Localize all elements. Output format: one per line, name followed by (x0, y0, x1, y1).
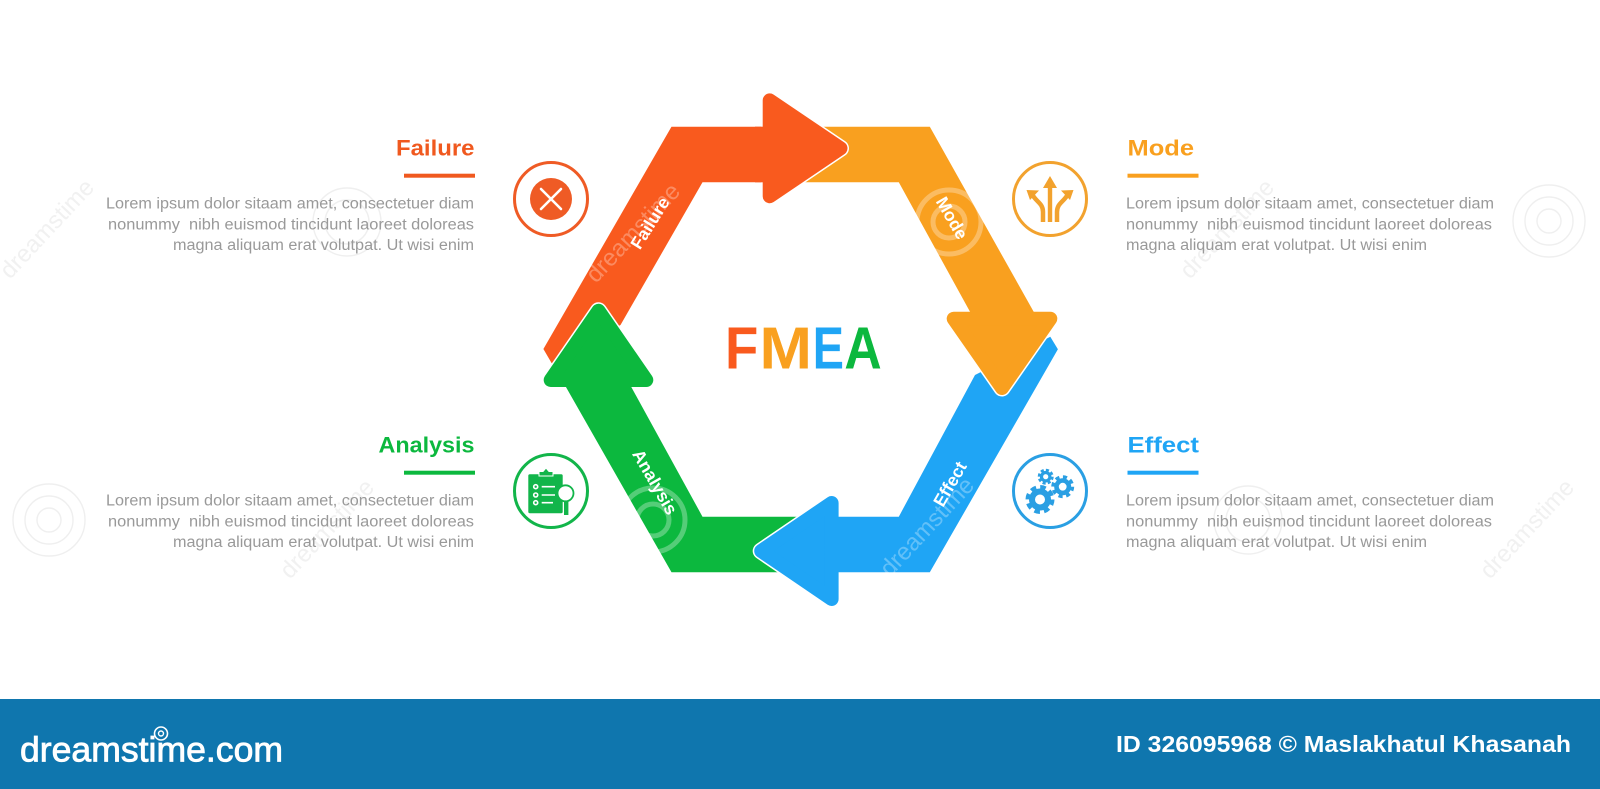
panel: Effect (1126, 433, 1494, 551)
heading: Failure: Failure (396, 136, 474, 161)
text block: Analysis: Lorem ipsum dolor sitaam amet, consectetuer diam (106, 492, 474, 509)
text block: Analysis: magna aliquam erat volutpat. Ut wisi enim (173, 534, 474, 551)
panel: Analysis (106, 433, 475, 551)
text block: Mode: nonummy nibh euismod tincidunt laoreet doloreas (1126, 216, 1492, 233)
text block: Failure: magna aliquam erat volutpat. Ut wisi enim (173, 237, 474, 254)
arrow: Mode (800, 127, 1050, 388)
text block: Effect: nonummy nibh euismod tincidunt laoreet doloreas (1126, 513, 1492, 530)
heading: Effect: Effect (1128, 433, 1200, 458)
heading: Analysis: Analysis (378, 433, 474, 458)
center title: FMEA (725, 315, 882, 381)
watermark: background spirals: dreamstime (1475, 474, 1580, 584)
watermark: background spirals: dreamstime (1175, 174, 1280, 284)
watermark: background spirals: dreamstime (275, 474, 380, 584)
text block: Mode: Lorem ipsum dolor sitaam amet, consectetuer diam (1126, 195, 1494, 212)
watermark: over arrows: dreamstime (581, 178, 686, 288)
text block: Effect (1126, 492, 1494, 551)
icon: mode diverging arrows (1014, 162, 1086, 236)
arrow label: Effect: Effect (929, 458, 971, 510)
panel: Mode (1126, 136, 1494, 254)
icon: analysis clipboard (514, 454, 588, 528)
text block: Effect: Lorem ipsum dolor sitaam amet, consectetuer diam (1126, 492, 1494, 509)
center title: FMEA: M (760, 315, 812, 381)
arrow: Analysis (551, 311, 800, 572)
arrow label: Analysis: Analysis (628, 446, 682, 518)
watermark: background spirals (0, 174, 1585, 584)
text block: Mode (1126, 195, 1494, 254)
footer credit: ID 326095968 © Maslakhatul Khasanah (1116, 731, 1571, 757)
panel: Failure (106, 136, 475, 254)
arrowhead: Failure (755, 100, 840, 196)
text block: Failure: nonummy nibh euismod tincidunt laoreet doloreas (108, 216, 474, 233)
arrow: Effect (761, 337, 1058, 599)
text block: Analysis: nonummy nibh euismod tincidunt laoreet doloreas (108, 513, 474, 530)
heading: Mode: Mode (1128, 136, 1194, 161)
text block: Analysis (106, 492, 474, 551)
center title: FMEA: A (844, 315, 882, 381)
arrow shaft: Failure (543, 127, 770, 363)
arrow label: Failure: Failure (626, 193, 674, 253)
center title: FMEA: F (725, 315, 758, 381)
text block: Effect: magna aliquam erat volutpat. Ut wisi enim (1126, 534, 1427, 551)
text block: Failure: Lorem ipsum dolor sitaam amet, consectetuer diam (106, 195, 474, 212)
watermark: over arrows (581, 178, 981, 582)
center title: FMEA: E (813, 315, 844, 381)
icon: effect gears (1014, 454, 1086, 528)
footer bar (0, 699, 1600, 789)
watermark: over arrows: dreamstime (875, 472, 980, 582)
arrow label: Mode: Mode (932, 193, 972, 243)
footer logo: dreamstime.com: dreamstime.com (20, 731, 283, 770)
icon: failure cross (514, 162, 588, 236)
text block: Mode: magna aliquam erat volutpat. Ut wisi enim (1126, 237, 1427, 254)
text block: Failure (106, 195, 474, 254)
